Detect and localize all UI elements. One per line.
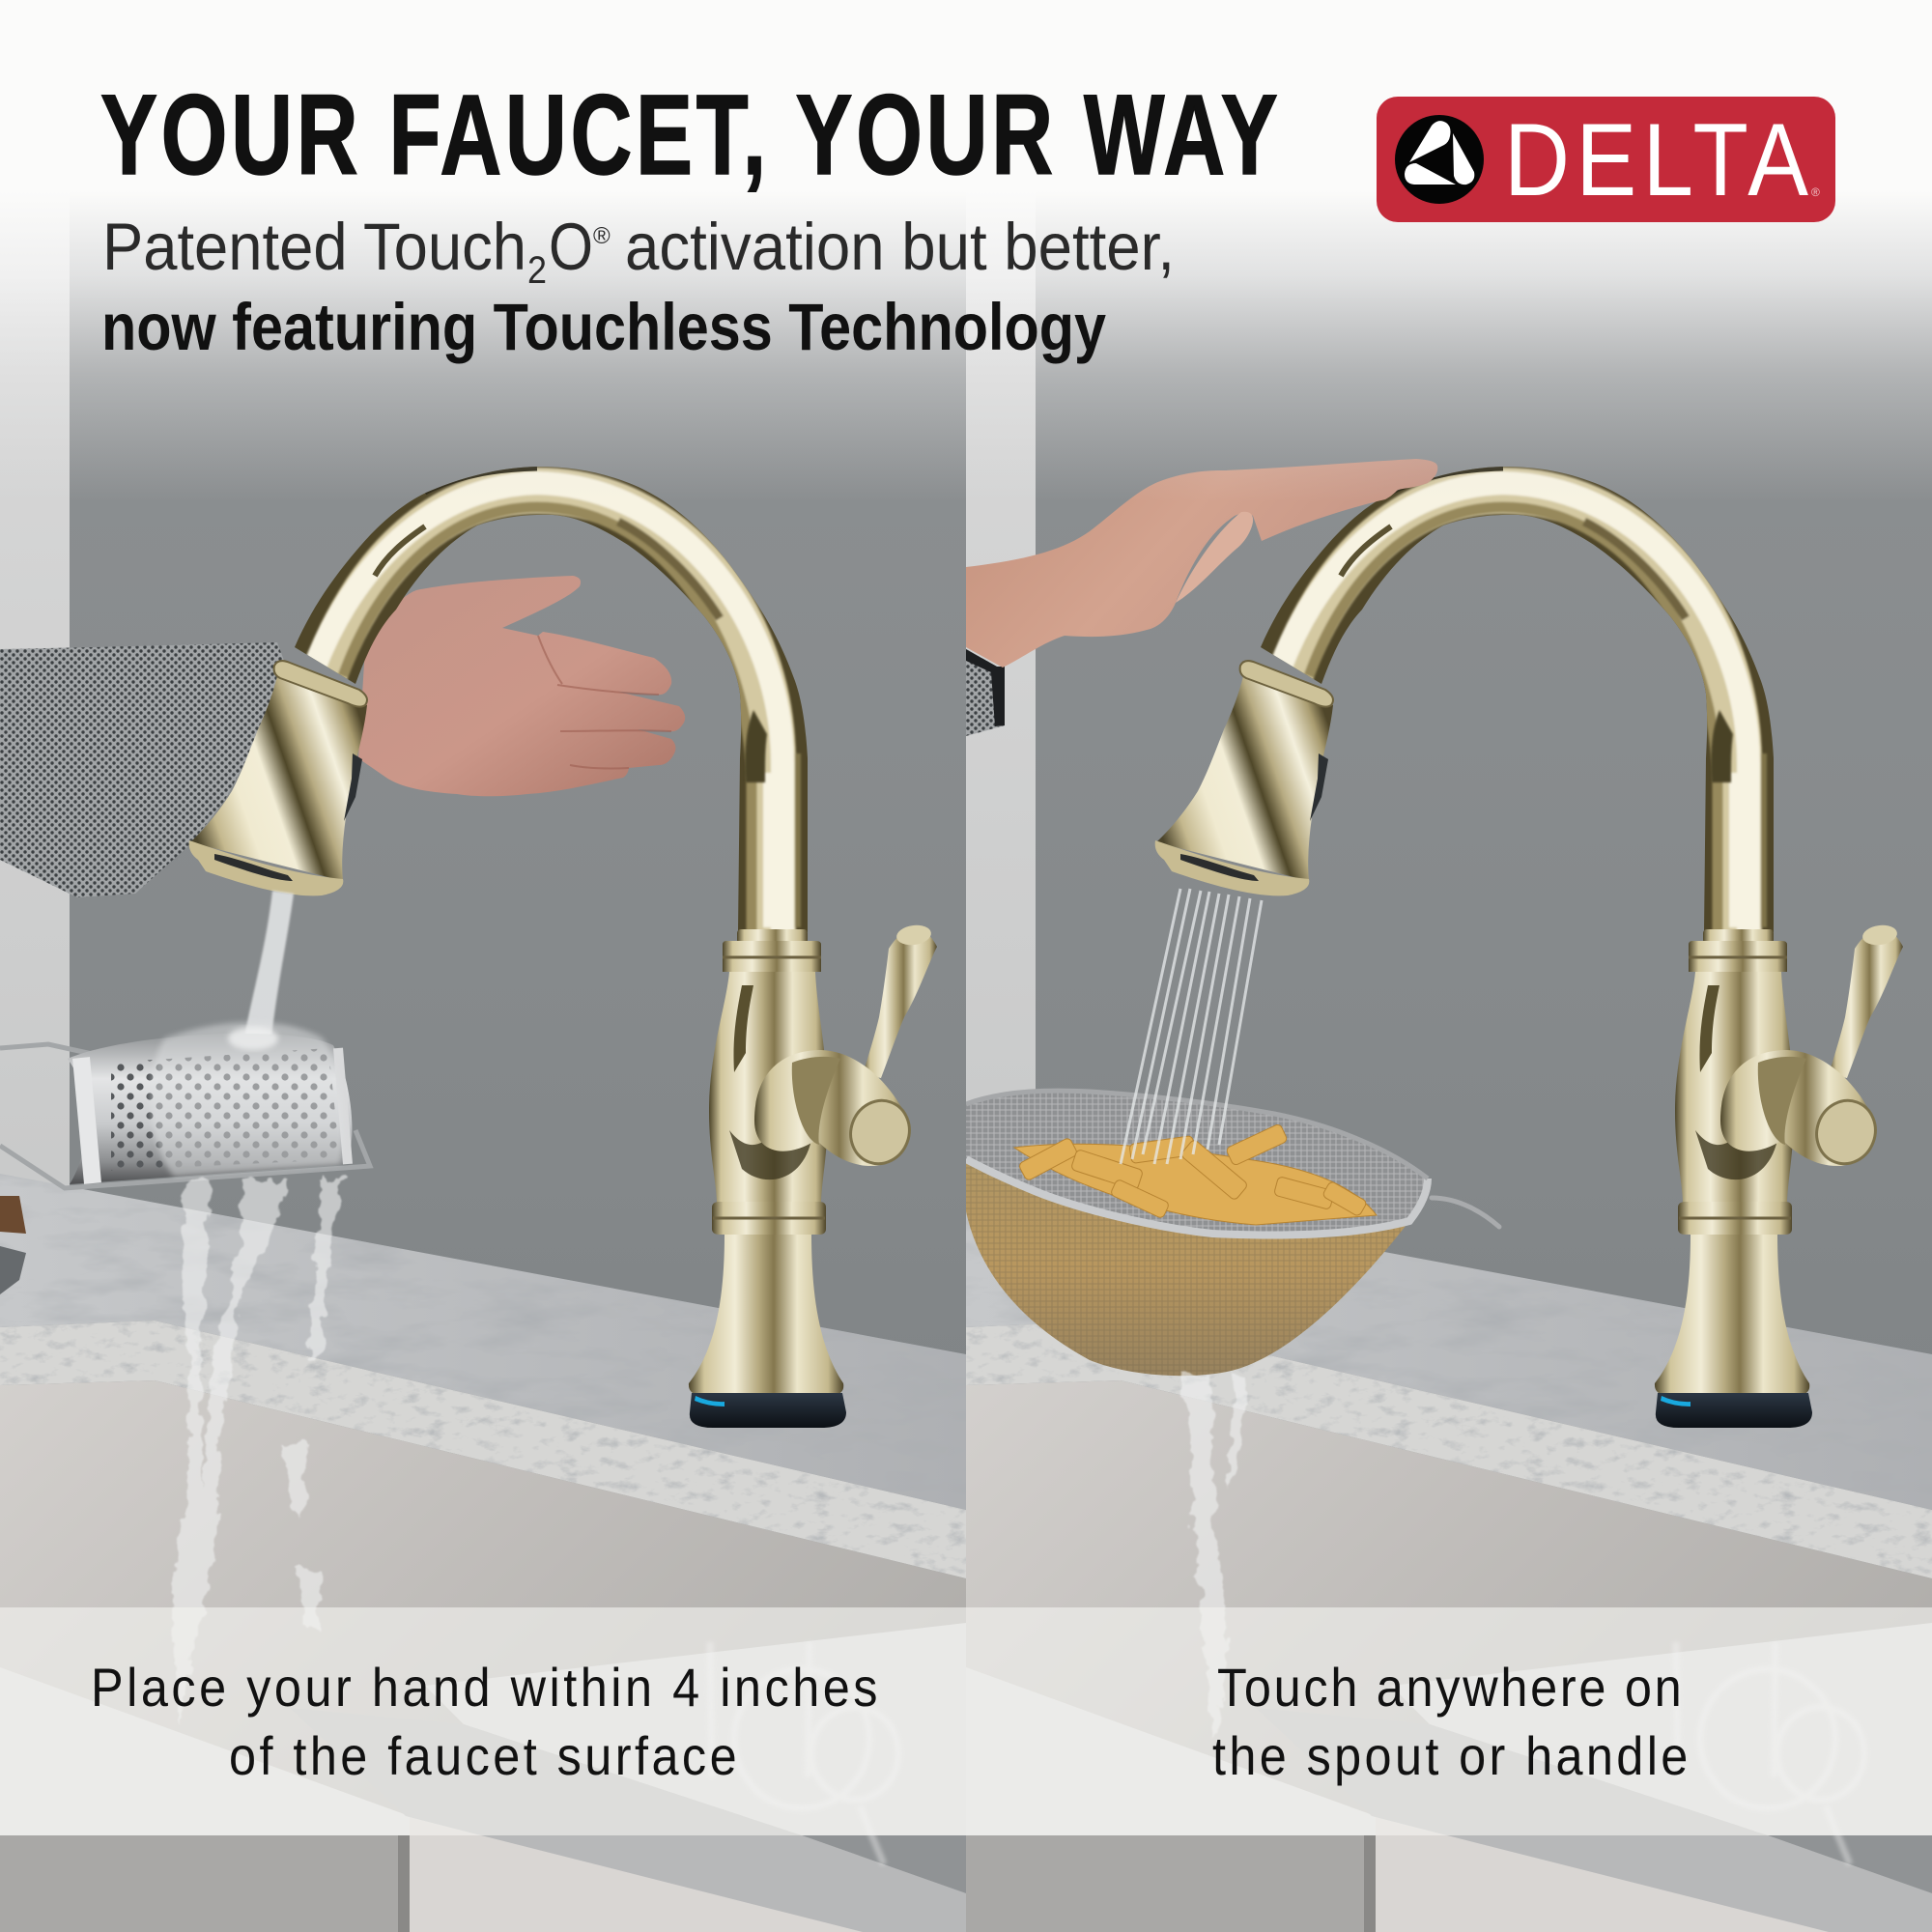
faucet reflection: left [710,1642,898,1864]
caption: left: of the faucet surface [229,1727,737,1787]
hand: touching spout [966,459,1437,668]
logo: Delta: DELTA [1504,102,1809,217]
logo: Delta [1377,97,1835,222]
panel: left hand-wave scene [0,220,966,1932]
water falling from grater [173,1179,343,1729]
faucet reflection: right [1676,1642,1864,1864]
faucet [189,467,937,1428]
water below strainer [1180,1374,1246,1739]
strainer rim [966,1159,1428,1236]
caption: right: the spout or handle [1212,1727,1688,1787]
caption band: left [0,1607,966,1835]
spray water [1121,889,1262,1164]
sleeve [0,642,290,897]
hand: open palm [358,576,685,796]
strainer bowl [966,1091,1499,1376]
subtitle line 1: Patented Touch [102,210,526,284]
subtitle line 2: now featuring Touchless Technology [101,290,1106,364]
logo: Delta: ® [1811,185,1820,199]
top fade overlay [0,0,1932,502]
subtitle line 1: activation but better, [625,210,1175,284]
subtitle line 1 [102,210,1175,292]
strainer handle [1432,1198,1499,1227]
caption: right [1212,1659,1688,1787]
subtitle line 1: ® [593,223,611,249]
shirt cuff [966,649,1005,736]
water stream [245,890,295,1034]
caption: right: Touch anywhere on [1217,1659,1682,1719]
title: YOUR FAUCET, YOUR WAY [100,72,1278,199]
cheese grater [0,1022,370,1188]
subtitle line 1: O [549,210,593,284]
caption: left: Place your hand within 4 inches [91,1659,878,1719]
faucet [1155,467,1903,1428]
pasta [1014,1123,1377,1225]
caption band: right [966,1607,1932,1835]
panel: right touch scene [966,220,1932,1932]
knife block [0,1196,26,1294]
logo mark [1395,115,1484,204]
subtitle line 1: 2 [527,249,547,292]
caption: left [91,1659,878,1787]
